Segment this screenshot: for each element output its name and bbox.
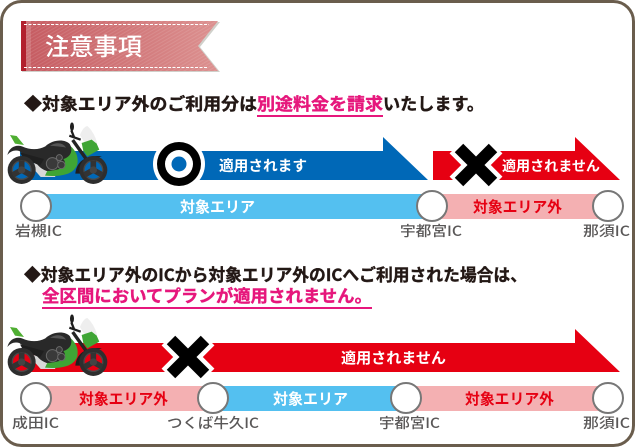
red arrow bottom: not applied: 適用されません (341, 347, 446, 368)
notice 2 text: ◆対象エリア外のICから対象エリア外のICへご利用された場合は、 (24, 261, 527, 286)
icon: circle mark (153, 138, 205, 190)
notice 1 text: いたします。 (383, 90, 484, 115)
interchange labels top: 宇都宮IC (400, 221, 462, 241)
interchange labels bottom: 那須IC (583, 413, 630, 433)
heading ribbon (21, 21, 220, 72)
icon: motorcycle top (7, 122, 107, 184)
interchange labels top: 那須IC (583, 221, 630, 241)
interchange labels top: 岩槻IC (15, 221, 62, 241)
notice 1 text: ◆対象エリア外のご利用分は (24, 90, 257, 115)
notice 1 text (24, 90, 484, 117)
route bar top (21, 191, 623, 221)
icon: motorcycle bottom (7, 314, 107, 376)
heading ribbon: 注意事項 (45, 27, 142, 62)
interchange labels bottom: つくば牛久IC (167, 413, 259, 433)
icon: cross mark bottom (169, 338, 207, 376)
route bar bottom (21, 383, 623, 413)
interchange labels bottom: 成田IC (12, 413, 59, 433)
notice 2 text (24, 261, 527, 309)
notice 1 text: 別途料金を請求 (257, 90, 383, 115)
route bar top: 対象エリア (180, 196, 255, 217)
route bar bottom: 対象エリア (273, 388, 348, 409)
red arrow: not applied: 適用されません (502, 156, 600, 176)
red arrow bottom: not applied (30, 329, 620, 372)
blue arrow: applied: 適用されます (219, 155, 307, 176)
route bar top: 対象エリア外 (473, 196, 562, 217)
notice 2 text: 全区間においてプランが適用されません。 (42, 282, 372, 307)
blue arrow: applied (20, 137, 428, 180)
red arrow: not applied (433, 137, 620, 180)
icon: cross mark top (457, 146, 495, 184)
route bar bottom: 対象エリア外 (465, 388, 554, 409)
interchange labels bottom: 宇都宮IC (379, 413, 440, 433)
route bar bottom: 対象エリア外 (79, 388, 168, 409)
interchange labels bottom (12, 413, 630, 433)
interchange labels top (15, 221, 630, 241)
